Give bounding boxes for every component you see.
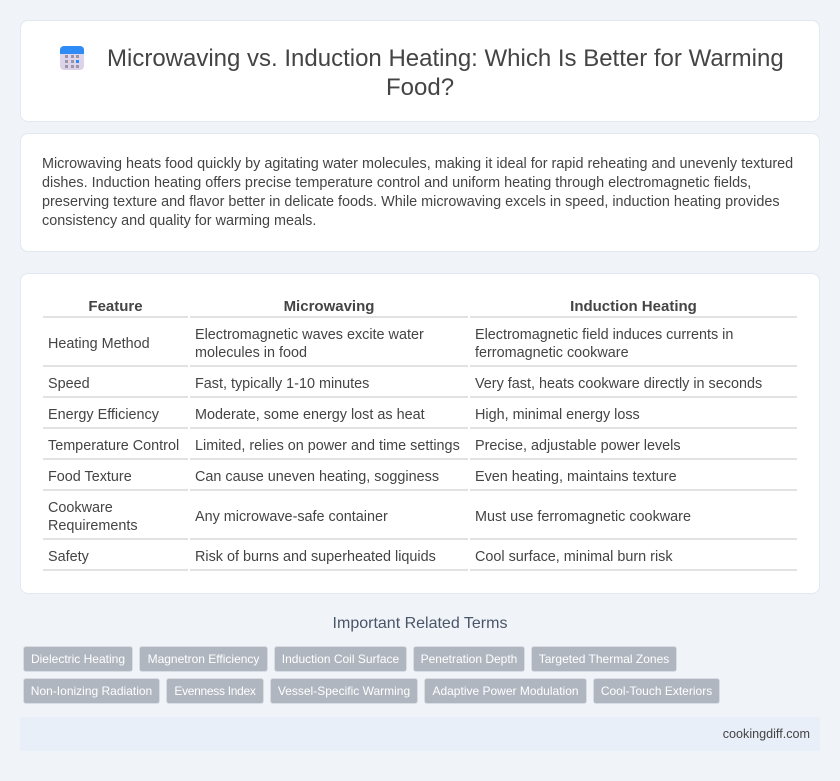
related term tags: Evenness Index bbox=[174, 684, 256, 698]
comparison table: Food Texture bbox=[48, 468, 132, 484]
comparison table: molecules in food bbox=[195, 344, 307, 360]
footer source: cookingdiff.com bbox=[723, 727, 810, 741]
comparison table: Fast, typically 1-10 minutes bbox=[195, 376, 369, 392]
comparison table: Moderate, some energy lost as heat bbox=[195, 406, 425, 422]
footer bar bbox=[20, 717, 820, 751]
intro text: dishes. Induction heating offers precise temperature control and uniform heating through electromagnetic fields, bbox=[42, 175, 751, 191]
comparison table: Speed bbox=[48, 376, 90, 392]
comparison table: Very fast, heats cookware directly in seconds bbox=[475, 376, 762, 392]
title bbox=[107, 45, 784, 101]
intro text: preserving texture and flavor better in delicate foods. While microwaving excels in speed, induction heating provides bbox=[42, 194, 780, 210]
comparison table: Limited, relies on power and time settings bbox=[195, 438, 460, 454]
related term tags: Dielectric Heating bbox=[31, 652, 125, 666]
related term tags: Targeted Thermal Zones bbox=[539, 652, 669, 666]
comparison table: Feature bbox=[88, 298, 143, 315]
related term tags: Penetration Depth bbox=[421, 652, 517, 666]
comparison table: Electromagnetic waves excite water bbox=[195, 326, 424, 342]
panel: comparison table bbox=[20, 273, 820, 594]
comparison table: Even heating, maintains texture bbox=[475, 468, 677, 484]
comparison table: Precise, adjustable power levels bbox=[475, 438, 681, 454]
related term tags: Vessel-Specific Warming bbox=[278, 684, 410, 698]
related term tags: Cool-Touch Exteriors bbox=[601, 684, 712, 698]
intro text: consistency and quality for warming meals. bbox=[42, 213, 316, 229]
panel: intro bbox=[20, 133, 820, 252]
comparison table: Electromagnetic field induces currents in bbox=[475, 326, 733, 342]
icon: calendar bbox=[60, 46, 84, 70]
title: Microwaving vs. Induction Heating: Which Is Better for Warming bbox=[107, 45, 784, 72]
title: Food? bbox=[386, 74, 454, 101]
comparison table: Requirements bbox=[48, 518, 138, 534]
related term tags: Induction Coil Surface bbox=[282, 652, 399, 666]
comparison table: Can cause uneven heating, sogginess bbox=[195, 468, 439, 484]
related term tags: Non-Ionizing Radiation bbox=[31, 684, 152, 698]
related term tags: Magnetron Efficiency bbox=[148, 652, 259, 666]
header card bbox=[20, 20, 820, 122]
comparison table: Any microwave-safe container bbox=[195, 508, 388, 524]
comparison table: Cookware bbox=[48, 500, 113, 516]
comparison table: ferromagnetic cookware bbox=[475, 344, 629, 360]
related term tags: Adaptive Power Modulation bbox=[432, 684, 579, 698]
comparison table: Microwaving bbox=[284, 298, 374, 315]
related terms heading: Important Related Terms bbox=[333, 615, 507, 632]
comparison table: Temperature Control bbox=[48, 438, 179, 454]
intro text bbox=[42, 156, 793, 229]
comparison table: Heating Method bbox=[48, 336, 150, 352]
comparison table: Cool surface, minimal burn risk bbox=[475, 548, 673, 564]
comparison table: Safety bbox=[48, 548, 89, 564]
comparison table: Must use ferromagnetic cookware bbox=[475, 508, 691, 524]
comparison table: Induction Heating bbox=[570, 298, 697, 315]
comparison table bbox=[43, 298, 797, 571]
intro text: Microwaving heats food quickly by agitating water molecules, making it ideal for rapid reheating and unevenly textured bbox=[42, 156, 793, 172]
comparison table: Energy Efficiency bbox=[48, 406, 159, 422]
related term tags bbox=[23, 646, 720, 704]
comparison table: High, minimal energy loss bbox=[475, 406, 640, 422]
comparison table: Risk of burns and superheated liquids bbox=[195, 548, 436, 564]
